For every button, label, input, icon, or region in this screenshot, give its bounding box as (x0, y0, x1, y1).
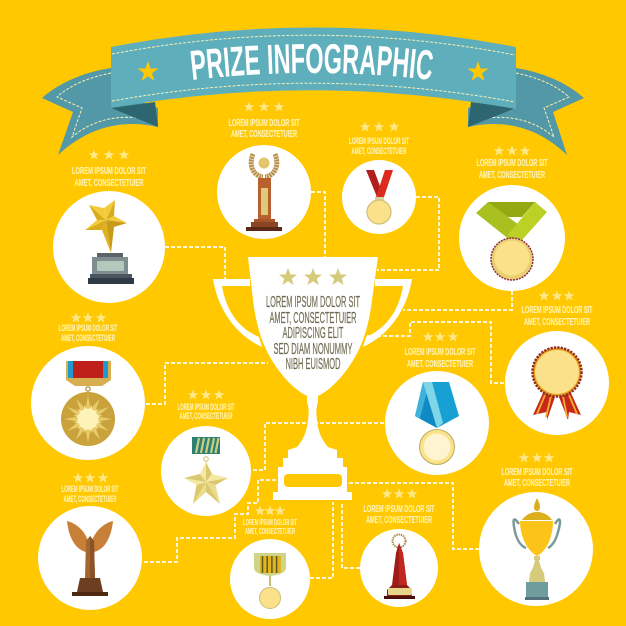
stars (188, 390, 224, 400)
label: AMET, CONSECTETUIER (61, 333, 115, 343)
item: shield medal (230, 506, 310, 619)
trophy text (266, 294, 360, 373)
label (72, 165, 146, 189)
label (364, 503, 435, 526)
circle (31, 346, 145, 460)
icon: red obelisk trophy (384, 534, 415, 599)
stars (89, 150, 129, 160)
label: AMET, CONSECTETUIER (245, 526, 295, 536)
label (522, 304, 593, 328)
circle (505, 331, 609, 435)
label: AMET, CONSECTETUIER (74, 177, 144, 189)
icon: star trophy (85, 200, 134, 284)
item: star medal: LOREM IPSUM DOLOR SIT (178, 402, 235, 412)
circle (161, 426, 251, 516)
label: AMET, CONSECTETUIER (352, 146, 407, 156)
title text: PRIZE INFOGRAPHIC (190, 44, 433, 80)
item: green ribbon medal (459, 146, 565, 291)
stars (382, 488, 417, 498)
label: LOREM IPSUM DOLOR SIT (58, 323, 118, 333)
item: red obelisk trophy (360, 488, 438, 607)
ribbon main band (111, 28, 516, 109)
stars (539, 290, 574, 300)
item: laurel trophy (217, 102, 311, 239)
label (349, 136, 409, 156)
label: LOREM IPSUM DOLOR SIT (243, 517, 297, 527)
connector lines (144, 192, 512, 578)
circle (217, 145, 311, 239)
circle (38, 506, 142, 610)
label: AMET, CONSECTETUIER (366, 514, 432, 526)
label: LOREM IPSUM DOLOR SIT (364, 503, 435, 515)
ribbon right tail (468, 68, 584, 155)
label: LOREM IPSUM DOLOR SIT (228, 117, 300, 129)
trophy plate (284, 474, 342, 487)
label: LOREM IPSUM DOLOR SIT (476, 157, 548, 169)
label: LOREM IPSUM DOLOR SIT (404, 346, 476, 358)
stars (71, 312, 106, 322)
circle (230, 539, 310, 619)
ribbon left tail (42, 68, 158, 155)
ribbon stitching (112, 35, 515, 102)
trophy text: ADIPISCING ELIT (282, 325, 344, 342)
circle (459, 185, 565, 291)
ribbon star left (138, 61, 158, 81)
stars (73, 472, 108, 482)
circle (53, 191, 165, 303)
icon: green medal (476, 202, 547, 280)
label: AMET, CONSECTETUIER (407, 358, 473, 370)
icon: sun medal (61, 361, 115, 446)
label: AMET, CONSECTETUIER (180, 411, 233, 421)
stars (255, 506, 285, 516)
item: sun medal (31, 312, 145, 460)
trophy cup and base (248, 257, 378, 500)
trophy text: SED DIAM NONUMMY (274, 341, 352, 358)
trophy text: NIBH EUISMOD (286, 356, 340, 373)
trophy stars (279, 268, 347, 285)
circle (360, 529, 438, 607)
central trophy: LOREM IPSUM DOLOR SIT (266, 294, 360, 311)
icon: blue medal (415, 382, 459, 464)
stars (519, 452, 554, 462)
icon: laurel trophy (246, 154, 282, 231)
circle (342, 160, 416, 234)
stars (244, 102, 284, 112)
icon: red medal (366, 170, 393, 224)
stars (494, 146, 530, 156)
item: star trophy (53, 150, 165, 303)
icon: star medal (184, 437, 228, 504)
stars (423, 332, 458, 342)
label (243, 517, 297, 536)
icon: wings trophy (67, 521, 113, 596)
item: blue ribbon medal (385, 332, 489, 475)
label (58, 323, 118, 343)
label (228, 117, 300, 140)
label (476, 157, 548, 181)
item: yellow cup (479, 452, 593, 606)
item: wings trophy (38, 472, 142, 610)
circle (479, 492, 593, 606)
item: rosette (505, 290, 609, 435)
label: LOREM IPSUM DOLOR SIT (349, 136, 409, 146)
trophy handles (213, 279, 412, 347)
item: star medal (161, 390, 251, 516)
item: red ribbon medal (342, 122, 416, 234)
label (178, 402, 235, 421)
label: AMET, CONSECTETUIER (479, 169, 545, 181)
label: AMET, CONSECTETUIER (231, 128, 297, 140)
icon: rosette (532, 348, 582, 420)
central trophy: AMET, CONSECTETUIER (270, 310, 356, 327)
title ribbon (42, 28, 584, 155)
label: AMET, CONSECTETUIER (64, 494, 117, 504)
icon: shield medal (254, 553, 286, 608)
central trophy (213, 257, 412, 500)
label: AMET, CONSECTETUIER (504, 477, 570, 489)
ribbon star right (468, 61, 488, 81)
label (62, 484, 119, 504)
stars (360, 122, 399, 132)
icon: yellow cup (514, 498, 560, 600)
label: LOREM IPSUM DOLOR SIT (72, 165, 146, 177)
item: wings trophy: LOREM IPSUM DOLOR SIT (62, 484, 119, 494)
label (404, 346, 476, 370)
circle (385, 371, 489, 475)
label (502, 466, 573, 489)
